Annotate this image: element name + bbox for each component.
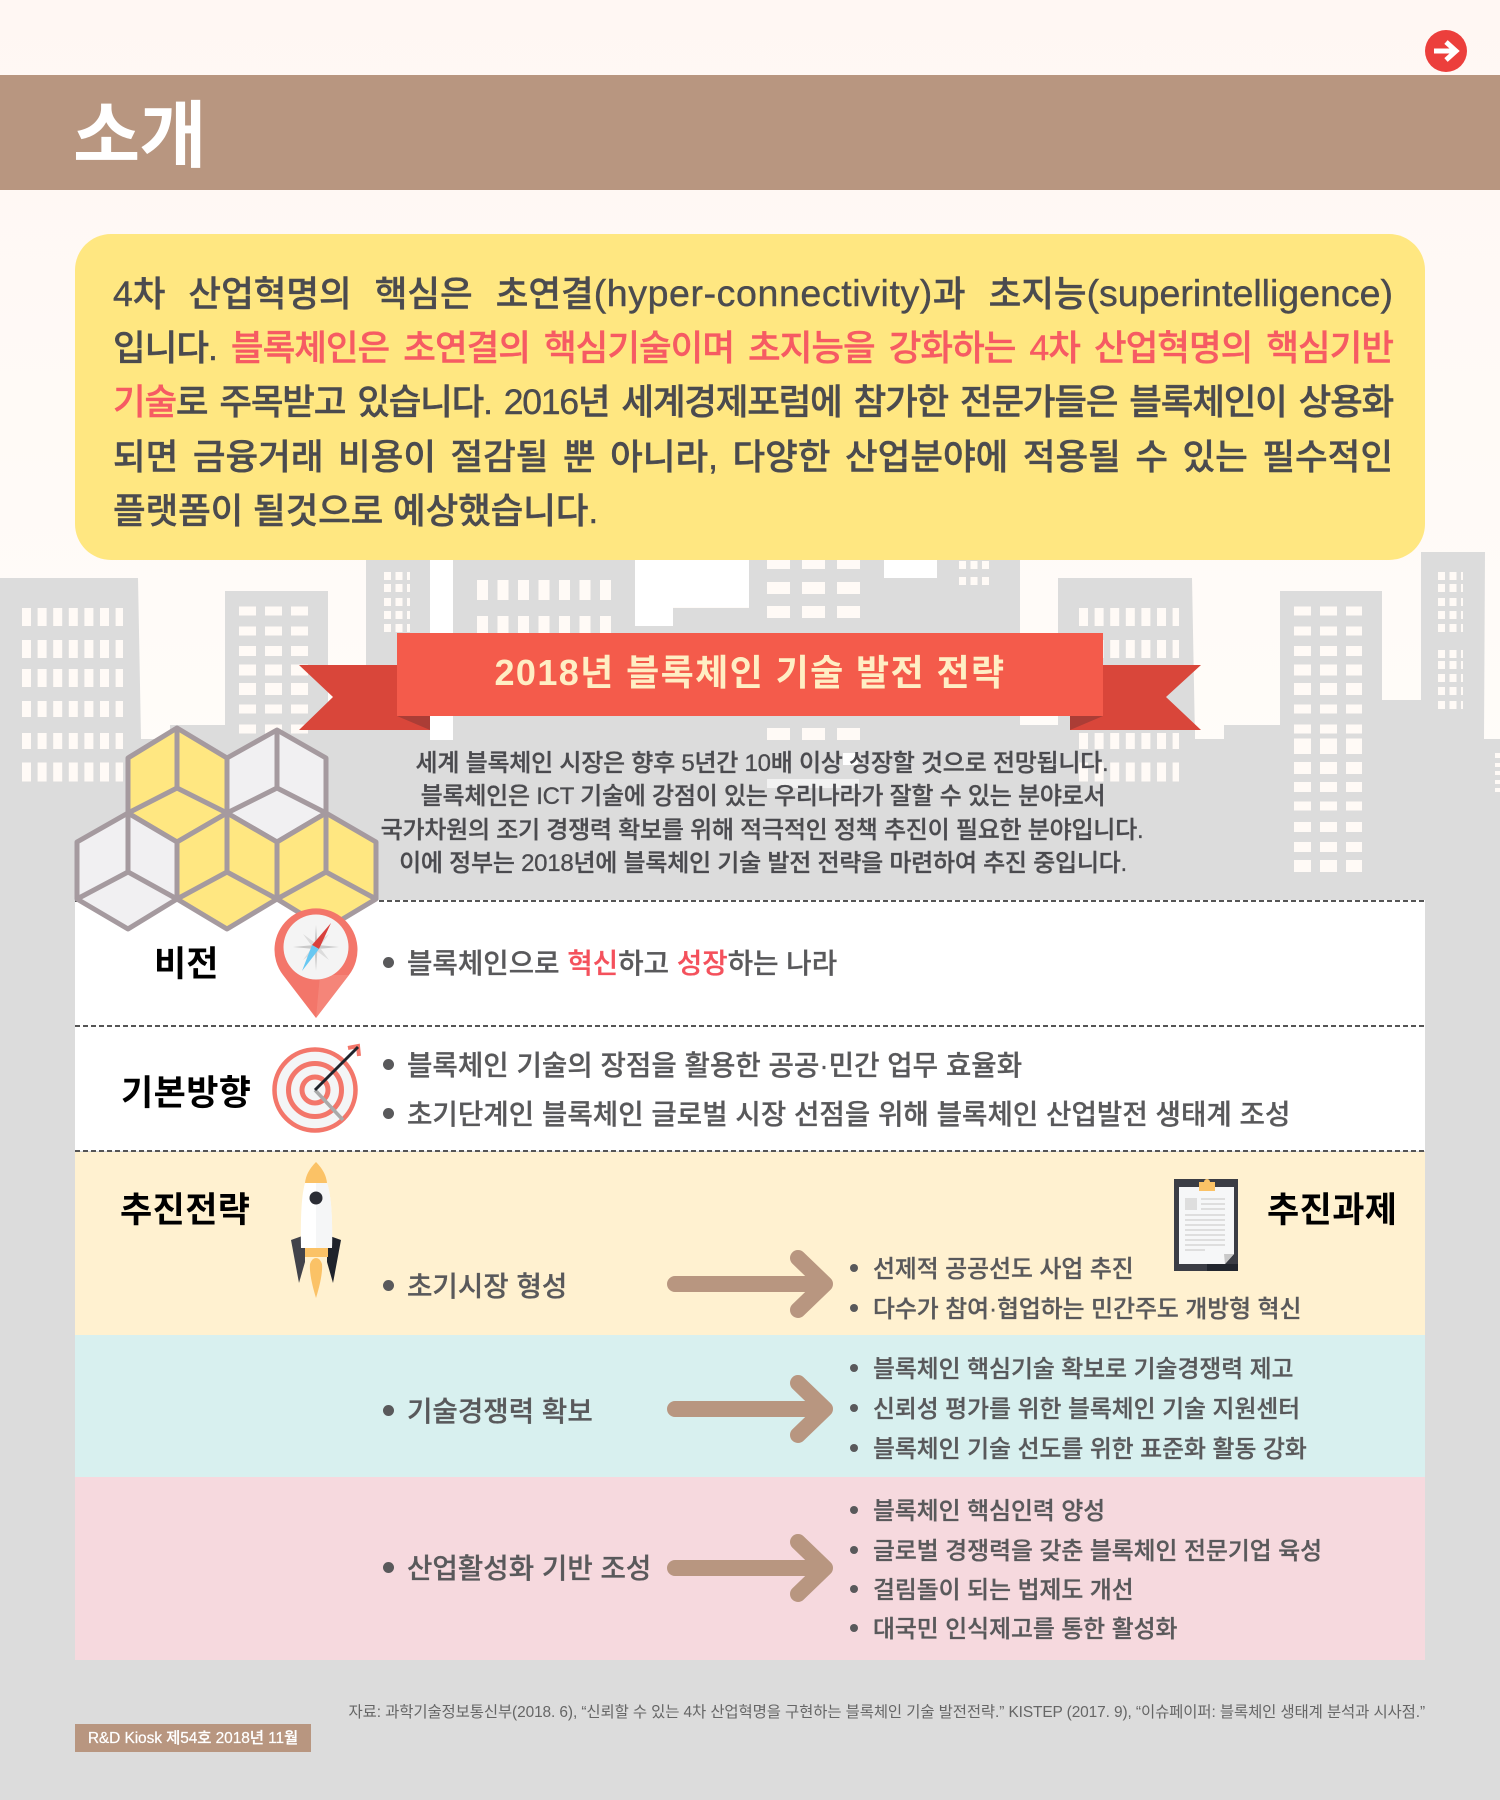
direction bullet 1: 블록체인 기술의 장점을 활용한 공공·민간 업무 효율화 (407, 1050, 1022, 1080)
icon: clipboard (1174, 1179, 1238, 1271)
title band (0, 75, 1500, 190)
task 1-2: 다수가 참여·협업하는 민간주도 개방형 혁신 (873, 1296, 1301, 1323)
vision bullet: 블록체인으로 혁신하고 성장하는 나라 (407, 948, 837, 978)
panel: vision and direction background (75, 900, 1425, 1151)
task 3-3: 걸림돌이 되는 법제도 개선 (873, 1577, 1134, 1604)
label: promotion tasks: 추진과제 (1267, 1191, 1397, 1230)
paragraph line 5: 플랫폼이 될것으로 예상했습니다. (113, 491, 598, 531)
source footnote: 자료: 과학기술정보통신부(2018. 6), “신뢰할 수 있는 4차 산업혁명을 구현하는 블록체인 기술 발전전략.” KISTEP (2017. 9), “이슈페이퍼: 블록체인 생태계 분석과 시사점.” (349, 1704, 1425, 1721)
strategy item 1: 초기시장 형성 (407, 1270, 567, 1302)
intro text line 4: 이에 정부는 2018년에 블록체인 기술 발전 전략을 마련하여 추진 중입니다. (399, 850, 1127, 877)
task 2-2: 신뢰성 평가를 위한 블록체인 기술 지원센터 (873, 1396, 1300, 1423)
strategy item 3: 산업활성화 기반 조성 (407, 1552, 651, 1584)
icon: hexagonal cubes (74, 726, 378, 932)
label: promotion strategy: 추진전략 (120, 1191, 250, 1230)
arrow 1 (667, 1250, 833, 1318)
direction bullet 2: 초기단계인 블록체인 글로벌 시장 선점을 위해 블록체인 산업발전 생태계 조성 (407, 1098, 1290, 1130)
ribbon banner (299, 633, 1201, 730)
panel: strategy row 1 (75, 1152, 1425, 1335)
banner heading: 2018년 블록체인 기술 발전 전략 (494, 652, 1006, 693)
task 2-3: 블록체인 기술 선도를 위한 표준화 활동 강화 (873, 1436, 1307, 1463)
panel: strategy row 3 (75, 1477, 1425, 1660)
next page arrow button (1425, 30, 1467, 72)
icon: rocket (291, 1162, 341, 1298)
panel: strategy row 2 (75, 1335, 1425, 1477)
issue badge: R&D Kiosk 제54호 2018년 11월 (88, 1730, 298, 1747)
paragraph line 4: 되면 금융거래 비용이 절감될 뿐 아니라, 다양한 산업분야에 적용될 수 있는 필수적인 (113, 436, 1393, 476)
task 3-2: 글로벌 경쟁력을 갖춘 블록체인 전문기업 육성 (873, 1538, 1322, 1565)
intro text line 2: 블록체인은 ICT 기술에 강점이 있는 우리나라가 잘할 수 있는 분야로서 (421, 783, 1105, 810)
arrow 2 (667, 1375, 833, 1443)
strategy item 2: 기술경쟁력 확보 (407, 1396, 593, 1426)
intro text line 1: 세계 블록체인 시장은 향후 5년간 10배 이상 성장할 것으로 전망됩니다. (416, 750, 1108, 777)
paragraph line 3: 기술로 주목받고 있습니다. 2016년 세계경제포럼에 참가한 전문가들은 블록체인이 상용화 (113, 382, 1393, 422)
icon: compass pin (274, 908, 358, 1018)
intro paragraph panel (75, 234, 1425, 560)
icon: target with arrow (272, 1044, 361, 1133)
paragraph line 1: 4차 산업혁명의 핵심은 초연결(hyper-connectivity)과 초지능(superintelligence) (113, 272, 1393, 314)
task 1-1: 선제적 공공선도 사업 추진 (873, 1256, 1134, 1283)
intro text line 3: 국가차원의 조기 경쟁력 확보를 위해 적극적인 정책 추진이 필요한 분야입니다. (381, 817, 1143, 844)
task 3-1: 블록체인 핵심인력 양성 (873, 1498, 1105, 1525)
label: basic direction: 기본방향 (121, 1074, 251, 1113)
task 2-1: 블록체인 핵심기술 확보로 기술경쟁력 제고 (873, 1356, 1294, 1383)
task 3-4: 대국민 인식제고를 통한 활성화 (873, 1616, 1177, 1643)
title: 소개 (73, 96, 206, 177)
label: vision: 비전 (154, 944, 218, 984)
arrow 3 (667, 1534, 833, 1602)
paragraph line 2: 입니다. 블록체인은 초연결의 핵심기술이며 초지능을 강화하는 4차 산업혁명의 핵심기반 (113, 328, 1393, 368)
issue badge (75, 1724, 311, 1752)
